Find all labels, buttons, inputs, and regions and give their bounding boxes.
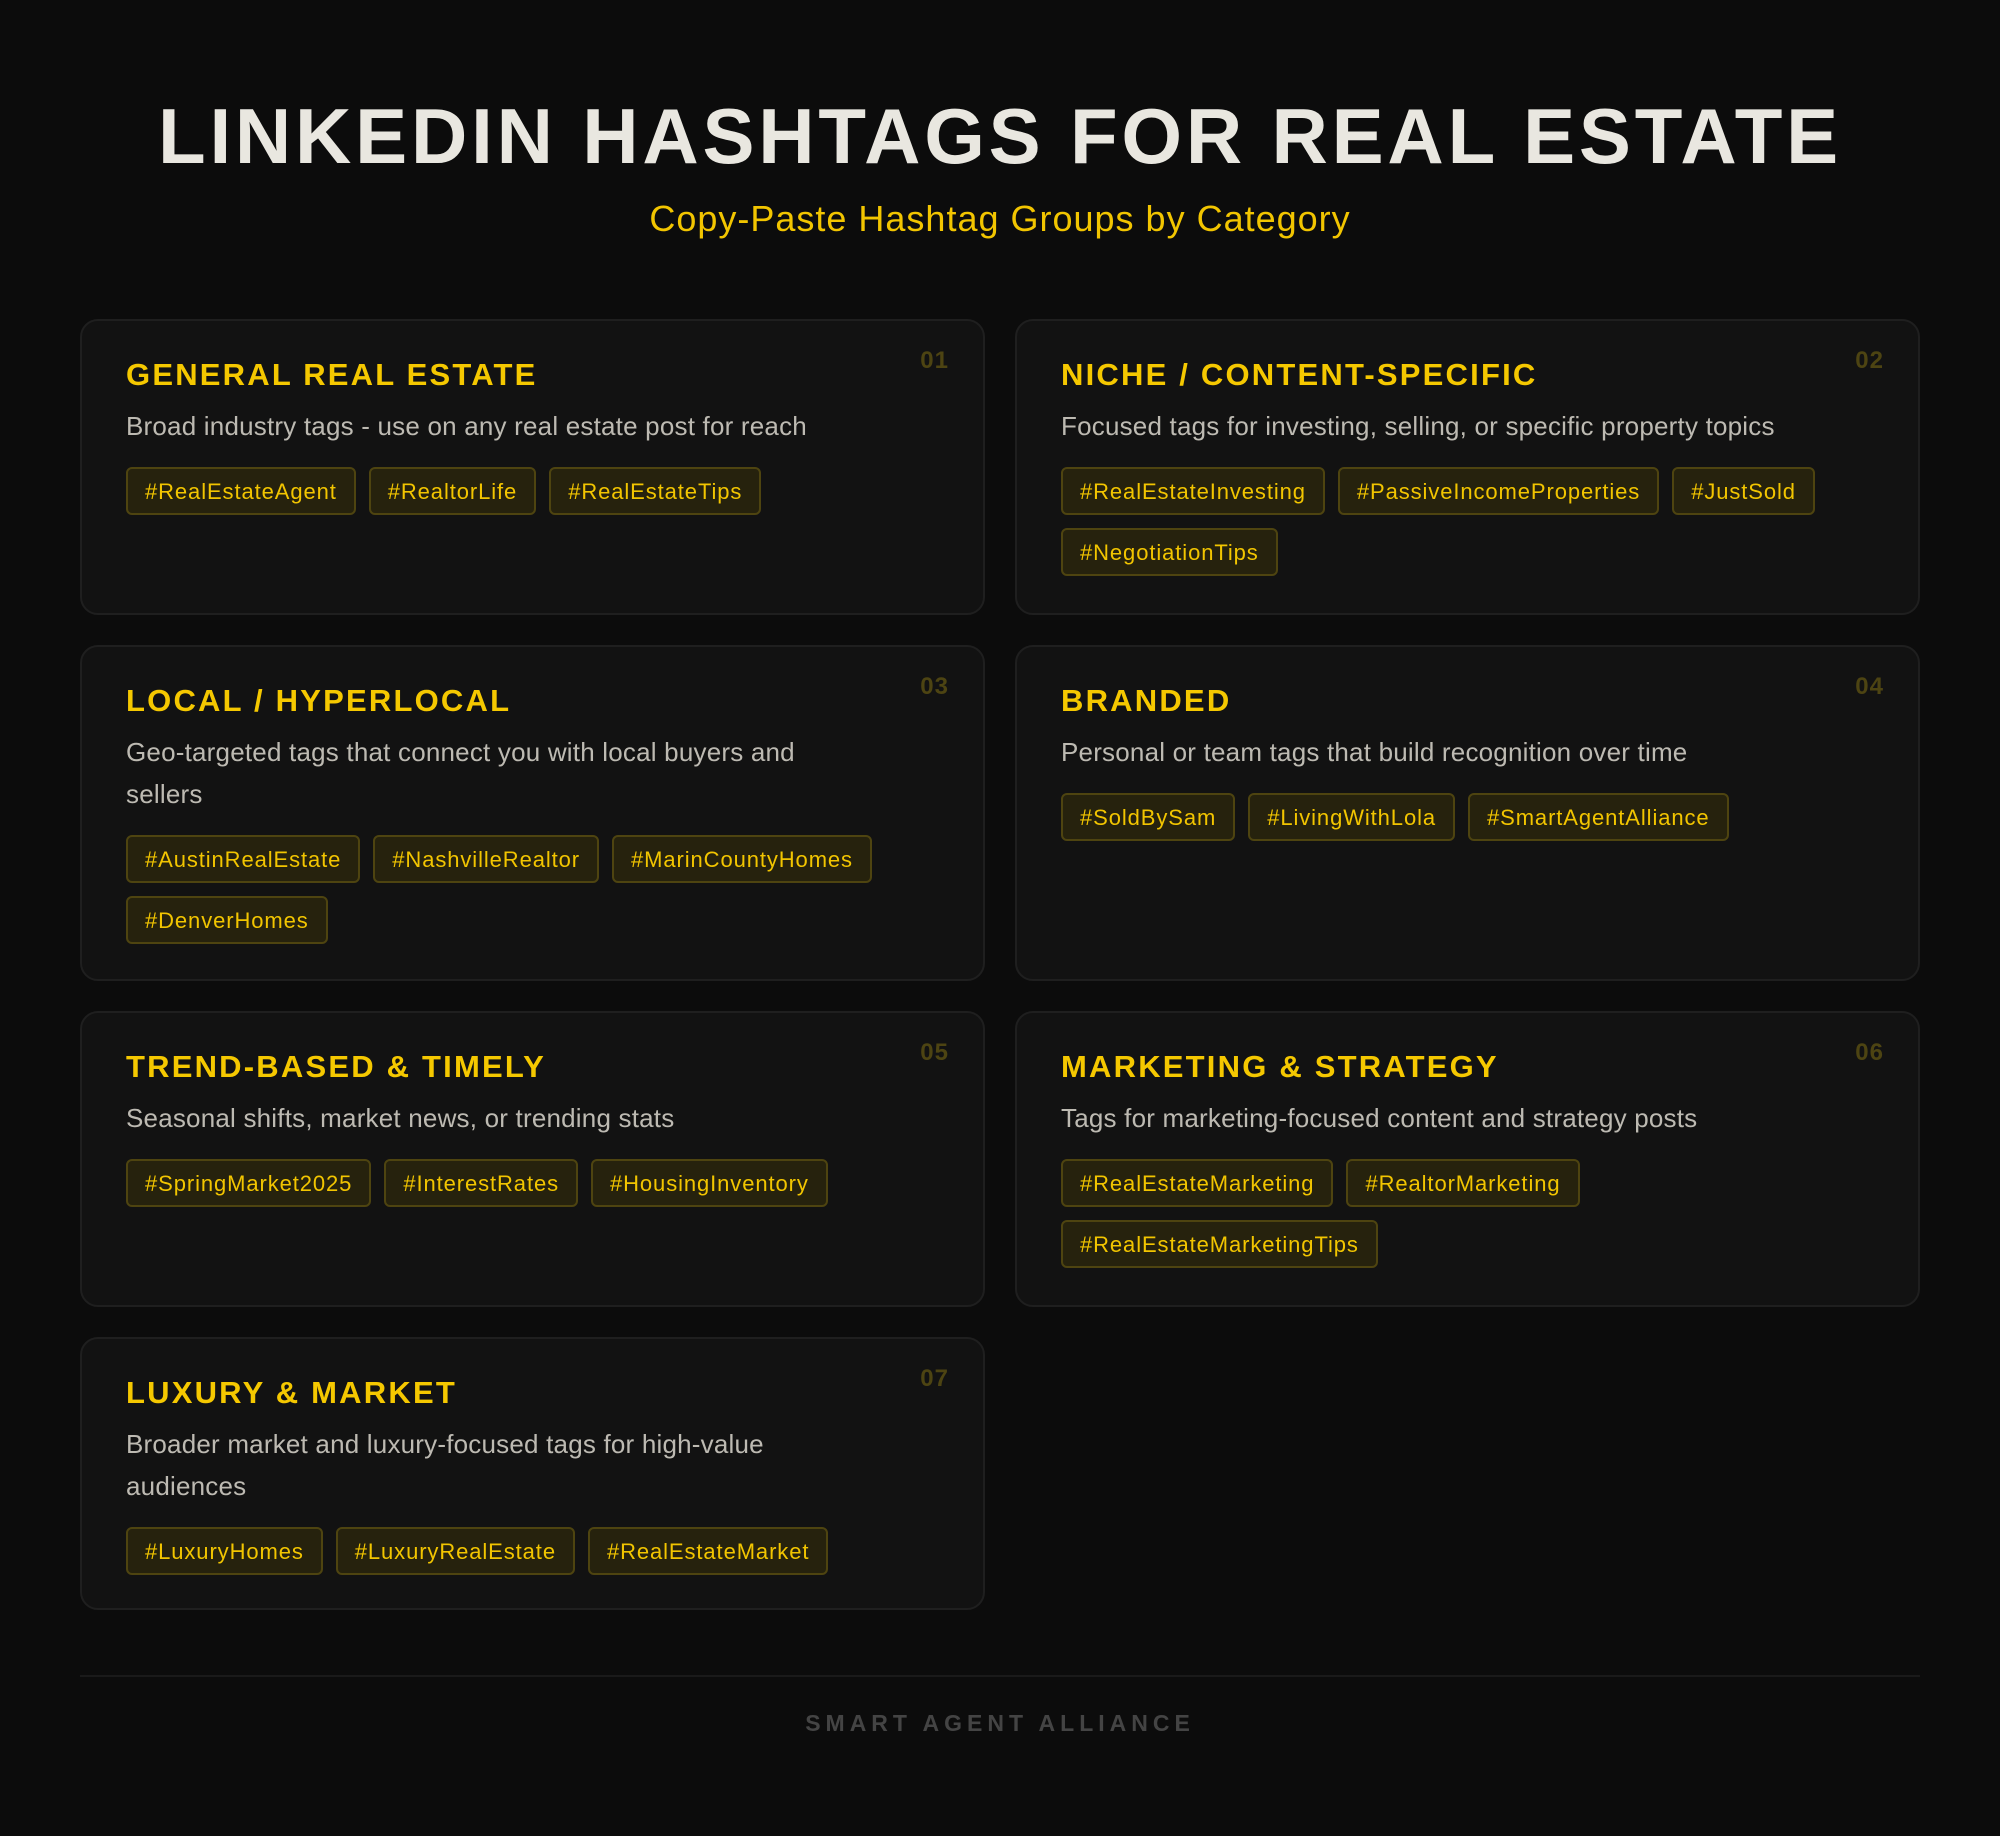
description (126, 737, 795, 809)
number: 05 (920, 1039, 949, 1066)
number: 01 (920, 347, 949, 374)
tags: #LivingWithLola (1267, 805, 1436, 830)
description: Focused tags for investing, selling, or specific property topics (1061, 411, 1775, 441)
tags: #HousingInventory (610, 1171, 809, 1196)
description: Tags for marketing-focused content and strategy posts (1061, 1103, 1697, 1133)
panel: trend-based (80, 1011, 985, 1307)
number: 04 (1855, 673, 1884, 700)
tags: #SoldBySam (1080, 805, 1216, 830)
tags (126, 1159, 828, 1207)
description: Personal or team tags that build recognition over time (1061, 737, 1687, 767)
heading: LUXURY & MARKET (126, 1375, 457, 1410)
panel: niche (1015, 319, 1920, 615)
description: Seasonal shifts, market news, or trending stats (126, 1103, 674, 1133)
tags (126, 467, 761, 515)
tags: #AustinRealEstate (145, 847, 341, 872)
tags: #InterestRates (403, 1171, 559, 1196)
tags: #SmartAgentAlliance (1487, 805, 1710, 830)
panel: local (80, 645, 985, 981)
heading: LOCAL / HYPERLOCAL (126, 683, 511, 718)
tags: #SpringMarket2025 (145, 1171, 352, 1196)
heading: GENERAL REAL ESTATE (126, 357, 538, 392)
number: 03 (920, 673, 949, 700)
number: 07 (920, 1365, 949, 1392)
description: sellers (126, 779, 203, 809)
heading: NICHE / CONTENT-SPECIFIC (1061, 357, 1538, 392)
footer: SMART AGENT ALLIANCE (805, 1710, 1195, 1736)
tags (1061, 1159, 1580, 1268)
description (126, 1429, 764, 1501)
tags: #RealtorLife (388, 479, 517, 504)
number: 02 (1855, 347, 1884, 374)
tags: #NashvilleRealtor (392, 847, 580, 872)
heading: TREND-BASED & TIMELY (126, 1049, 546, 1084)
tags: #MarinCountyHomes (631, 847, 853, 872)
tags: #RealEstateMarket (607, 1539, 809, 1564)
tags (126, 1527, 828, 1575)
number: 06 (1855, 1039, 1884, 1066)
tags: #RealEstateMarketing (1080, 1171, 1314, 1196)
tags (126, 835, 872, 944)
subtitle: Copy-Paste Hashtag Groups by Category (649, 198, 1351, 239)
tags: #LuxuryHomes (145, 1539, 304, 1564)
title: LINKEDIN HASHTAGS FOR REAL ESTATE (158, 92, 1842, 180)
panel: luxury (80, 1337, 985, 1610)
tags: #RealEstateMarketingTips (1080, 1232, 1359, 1257)
heading: BRANDED (1061, 683, 1231, 718)
tags: #PassiveIncomeProperties (1357, 479, 1640, 504)
tags: #DenverHomes (145, 908, 309, 933)
panel: marketing (1015, 1011, 1920, 1307)
description: audiences (126, 1471, 246, 1501)
description: Broad industry tags - use on any real estate post for reach (126, 411, 807, 441)
heading: MARKETING & STRATEGY (1061, 1049, 1499, 1084)
tags: #RealEstateTips (568, 479, 742, 504)
tags: #LuxuryRealEstate (355, 1539, 556, 1564)
description: Broader market and luxury-focused tags for high-value (126, 1429, 764, 1459)
tags (1061, 467, 1815, 576)
tags: #RealtorMarketing (1365, 1171, 1561, 1196)
tags (1061, 793, 1729, 841)
tags: #RealEstateInvesting (1080, 479, 1306, 504)
panel: branded (1015, 645, 1920, 981)
description: Geo-targeted tags that connect you with local buyers and (126, 737, 795, 767)
tags: #JustSold (1691, 479, 1796, 504)
tags: #NegotiationTips (1080, 540, 1259, 565)
tags: #RealEstateAgent (145, 479, 337, 504)
panel: general real estate (80, 319, 985, 615)
